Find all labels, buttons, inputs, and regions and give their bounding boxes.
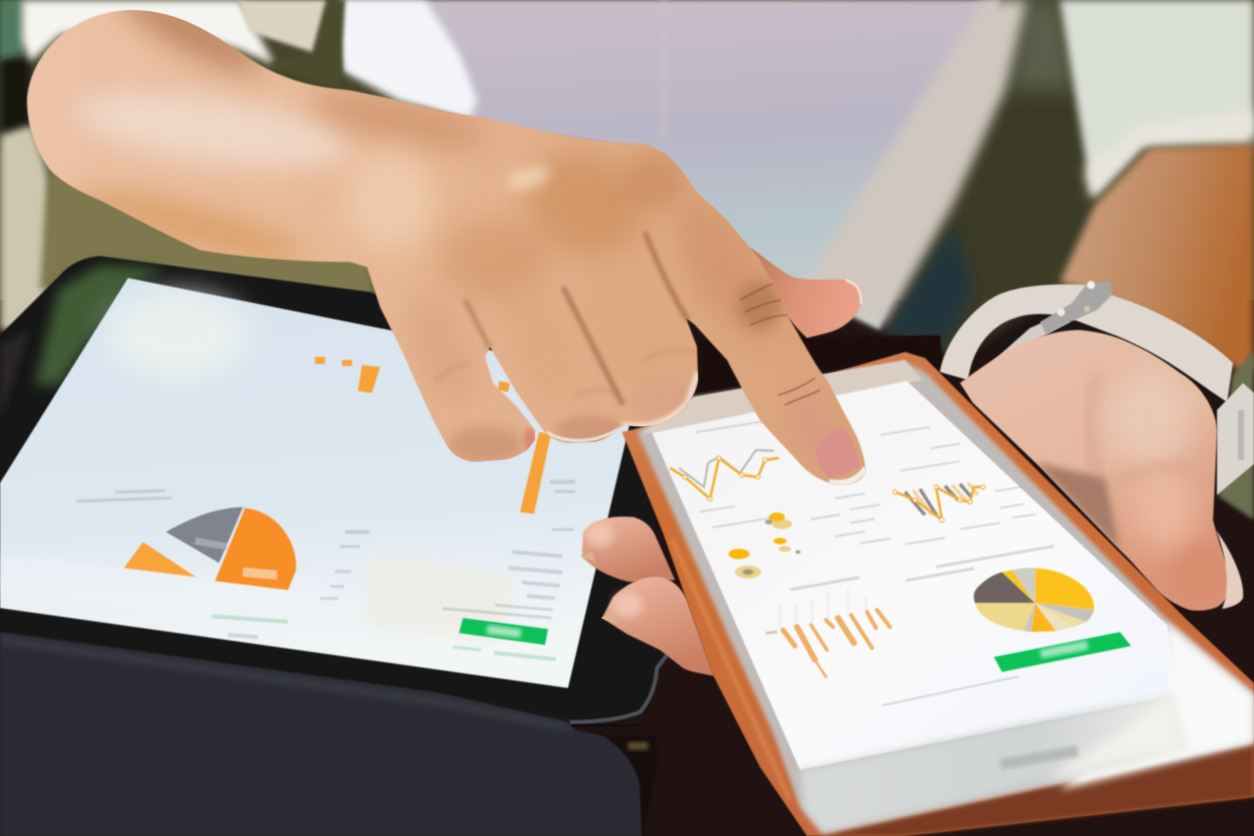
knuckle highlight: [504, 163, 552, 193]
forearm: [1060, 145, 1254, 372]
bar chart bottom: [767, 588, 890, 677]
green labels: [212, 614, 556, 661]
finger valleys: [465, 232, 688, 405]
slit under rim: [572, 725, 640, 726]
navy trousers: [885, 225, 972, 345]
band left: [0, 555, 340, 625]
nails: [580, 552, 596, 562]
flap corner: [604, 736, 658, 836]
right glare: [1060, 622, 1254, 790]
back finger: [750, 247, 862, 338]
finger highlights: [586, 523, 614, 547]
left edge highlight: [672, 540, 790, 800]
right shirt sleeve: [1060, 0, 1254, 198]
knuckle shade: [518, 143, 649, 263]
soft finger joint creases: [435, 350, 695, 395]
orange bars: [315, 357, 551, 514]
buckle: [1040, 281, 1112, 334]
bubble charts: [728, 512, 800, 578]
shirt flap right: [800, 0, 1027, 326]
rose gold case: [622, 352, 1254, 836]
right arm and watch: [940, 145, 1254, 520]
pie chart: [124, 507, 296, 590]
palm shadow: [1035, 462, 1120, 550]
silver bezel: [637, 362, 1254, 833]
right holding hand: [960, 330, 1243, 611]
side of frame: [0, 330, 30, 420]
dark gap left: [0, 55, 32, 150]
shirt main lavender: [345, 0, 1000, 330]
index nail tip: [829, 468, 866, 483]
index finger tone: [674, 194, 764, 338]
green reflection: [35, 265, 165, 385]
olive patch: [1218, 350, 1254, 520]
index nail: [816, 428, 860, 478]
shading clipped to hand: [69, 0, 866, 483]
upper finger: [582, 517, 675, 582]
line chart top left: [670, 450, 779, 501]
lower fingers of holding hand: [580, 517, 714, 676]
screen glare: [108, 293, 248, 377]
thumb nail: [1216, 530, 1243, 609]
fingertip rims: [622, 372, 698, 426]
beige wall left: [0, 125, 50, 330]
dark under hand: [700, 335, 945, 400]
smartphone: [622, 352, 1254, 836]
thumb base highlight: [1108, 368, 1192, 472]
home bright patch: [1050, 700, 1175, 782]
button label blur: [487, 625, 521, 638]
wrist shading: [306, 88, 486, 156]
brown bottom band: [815, 740, 1254, 836]
lower band in screen: [365, 555, 515, 640]
arm top shade: [110, 10, 266, 85]
wrinkles: [740, 282, 820, 405]
tablet case: [0, 632, 667, 836]
left shirt sleeve: [22, 0, 275, 65]
blurred labels: [76, 480, 575, 639]
phone button label blur: [1040, 640, 1089, 658]
tan top bezel: [642, 360, 922, 433]
green wall corner: [0, 0, 24, 62]
arm lower warm: [73, 174, 310, 260]
home area: [800, 693, 1190, 833]
wrist highlight: [345, 150, 435, 250]
fingertip tones: [556, 416, 624, 444]
thumb crease shade: [1131, 461, 1176, 474]
hand silhouette: [27, 10, 865, 484]
arm highlight: [72, 79, 358, 181]
shirt tag: [238, 0, 326, 52]
olive behind right: [885, 0, 1095, 360]
tablet screen: [0, 278, 640, 688]
case rim highlight: [570, 655, 667, 722]
shirt placket: [660, 0, 668, 140]
dark window inside strap: [975, 318, 1180, 370]
home button: [1000, 745, 1078, 770]
olive backdrop left: [40, 170, 375, 300]
palm crease: [1090, 375, 1100, 478]
watch strap loop: [940, 284, 1233, 402]
chart top right: [893, 483, 985, 522]
finger base tones: [571, 244, 679, 396]
shirt white bulge: [338, 0, 477, 118]
lower finger: [602, 577, 714, 676]
phone green button: [994, 632, 1131, 672]
phone blurred text: [695, 419, 1054, 707]
thumb tip tone: [1179, 546, 1225, 598]
left arm and pointing hand: [27, 0, 866, 484]
strap second strand: [985, 314, 1070, 375]
green button: [459, 618, 548, 645]
phone pie chart: [974, 568, 1094, 632]
tablet: [0, 256, 668, 724]
tablet body: [0, 256, 668, 724]
thumb pad: [1133, 470, 1197, 550]
watch case side: [1217, 383, 1254, 495]
index wrinkle: [738, 281, 782, 329]
index tip pink: [775, 383, 855, 477]
phone screen: [652, 381, 1178, 770]
